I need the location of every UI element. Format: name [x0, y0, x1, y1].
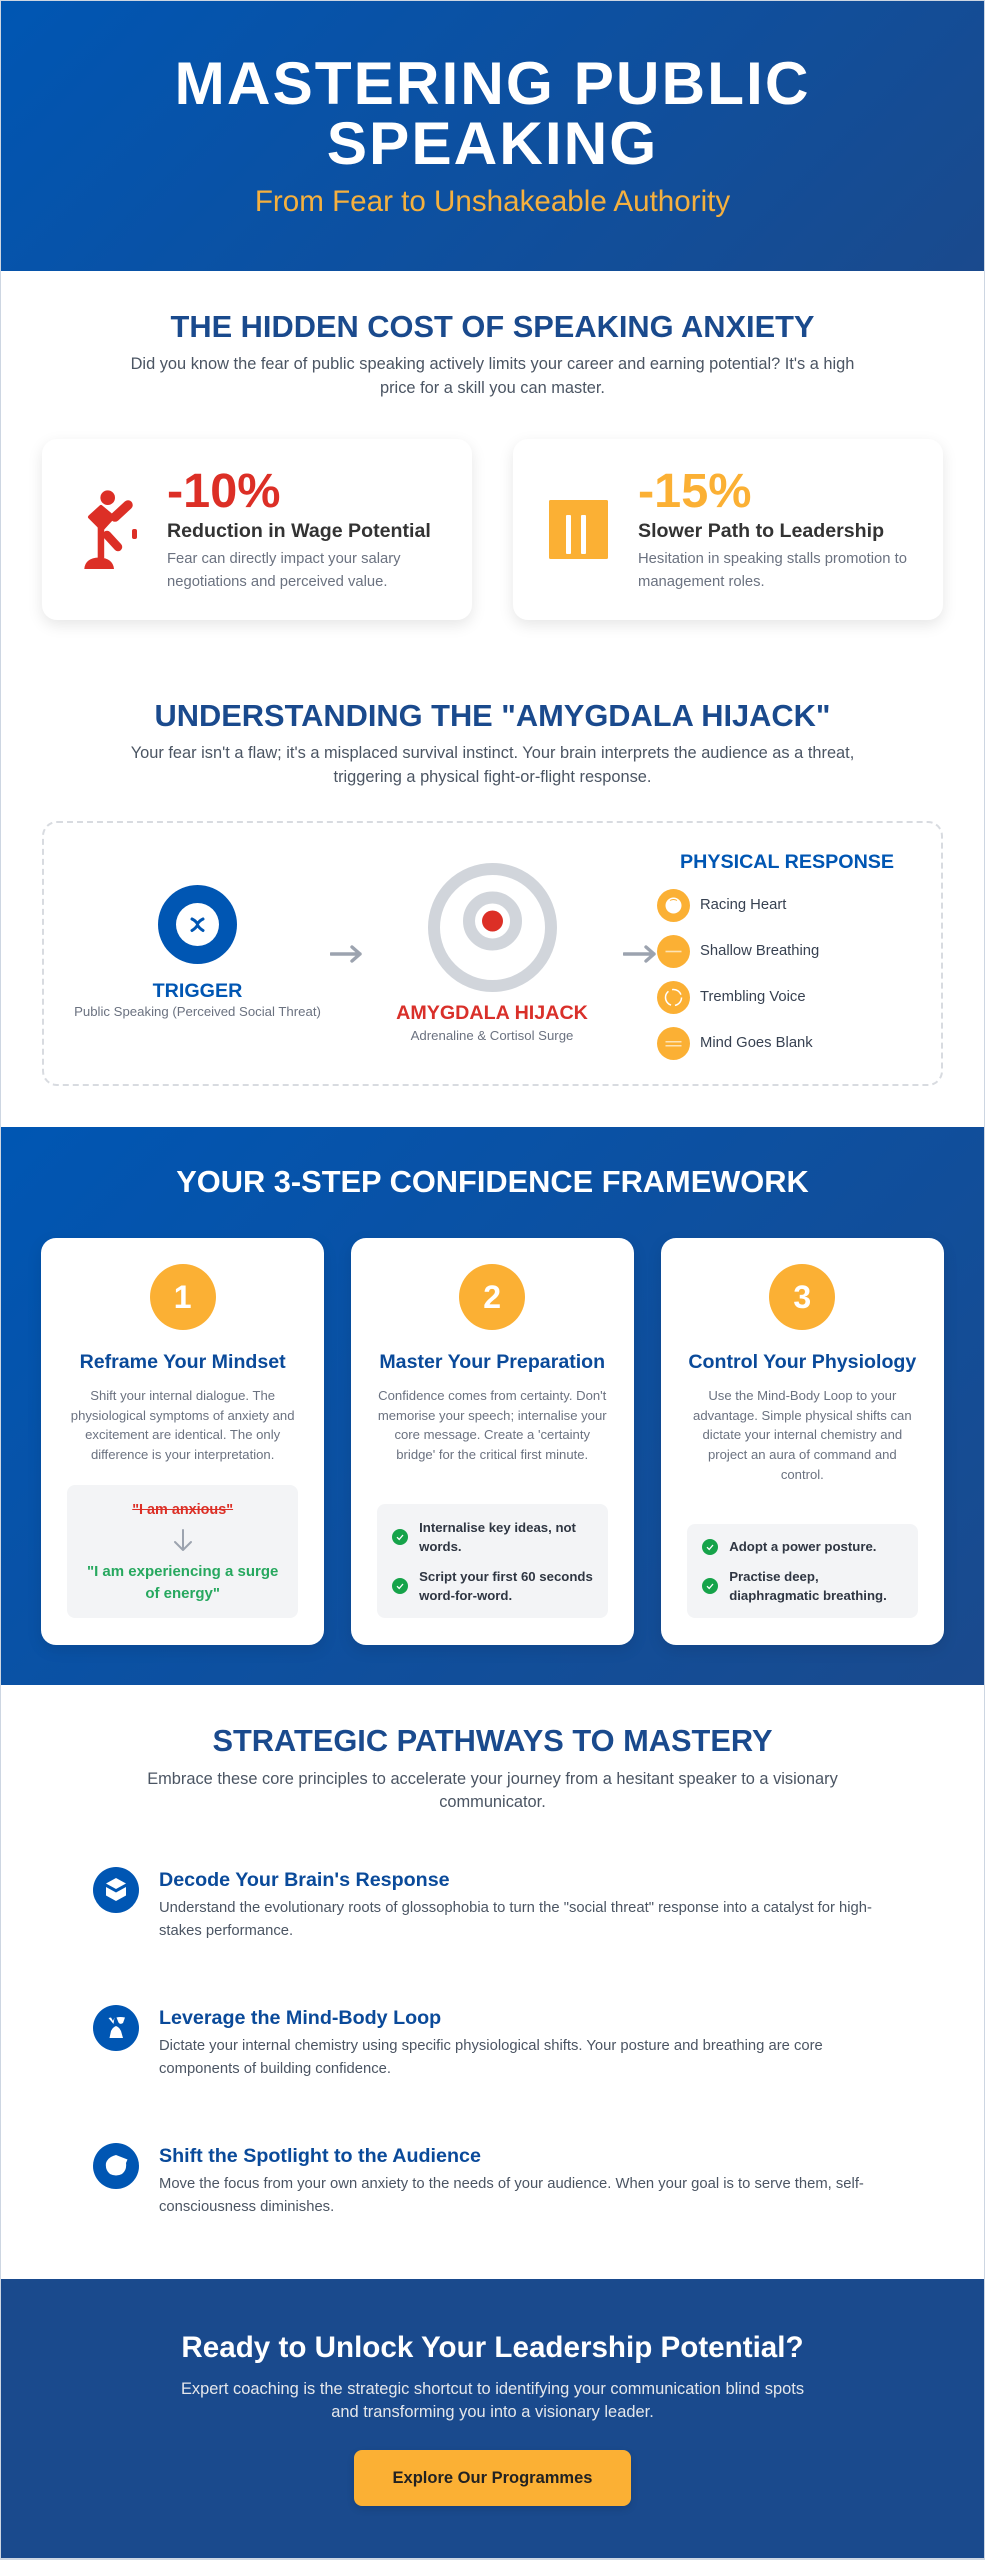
stat value: -10%: [167, 464, 280, 518]
step number: [150, 1264, 216, 1330]
flow diagram panel: [42, 821, 943, 1086]
arrow: down: [174, 1529, 192, 1551]
stat description: [167, 551, 401, 590]
step description: difference is your interpretation.: [91, 1447, 274, 1462]
step description: excitement are identical. The only: [85, 1427, 280, 1442]
pathway title: Shift the Spotlight to the Audience: [159, 2145, 481, 2167]
step card 3: [661, 1238, 944, 1645]
step description: project an aura of command and: [708, 1447, 897, 1462]
reframed phrase: "I am experiencing a surge: [87, 1563, 278, 1580]
reframed phrase: of energy": [145, 1585, 220, 1602]
step title: Reframe Your Mindset: [80, 1351, 286, 1373]
step description: dictate your internal chemistry and: [702, 1427, 902, 1442]
pathway description: components of building confidence.: [159, 2061, 391, 2077]
pathway description: consciousness diminishes.: [159, 2199, 334, 2215]
check item: Internalise key ideas, not: [419, 1520, 576, 1534]
check item: Script your first 60 seconds: [419, 1568, 593, 1584]
step description: [693, 1388, 912, 1482]
icon: anxious speaker figure: [84, 490, 137, 569]
pathway 2: [93, 2005, 823, 2077]
stat description: [638, 551, 907, 590]
step number: 1: [174, 1279, 191, 1315]
check item: words.: [419, 1539, 462, 1554]
intro text: triggering a physical fight-or-flight response.: [334, 768, 651, 786]
section: hidden cost of speaking anxiety: [0, 271, 985, 661]
stat value: -15%: [638, 464, 751, 518]
step description: bridge' for the critical first minute.: [396, 1447, 588, 1462]
response: trembling voice: Trembling Voice: [700, 988, 806, 1004]
step card 2: [351, 1238, 634, 1645]
step description: [378, 1388, 607, 1462]
icon: pause square: [549, 500, 608, 559]
response: trembling voice: [657, 981, 806, 1014]
arrow: trigger to hijack: [330, 945, 362, 963]
check item: [392, 1568, 593, 1603]
step number: [769, 1264, 835, 1330]
response: racing heart: [657, 889, 786, 922]
pathway description: Move the focus from your own anxiety to the needs of your audience. When your goal is to serve them, self-: [159, 2176, 864, 2192]
section: amygdala hijack: [0, 661, 985, 1127]
arrow: hijack to response: [623, 945, 656, 963]
intro text: [147, 1770, 838, 1811]
icon: spotlight: [93, 2143, 139, 2189]
response heading: PHYSICAL RESPONSE: [680, 851, 894, 873]
intro text: communicator.: [439, 1793, 546, 1811]
title: MASTERING PUBLIC: [175, 49, 810, 117]
check item: Adopt a power posture.: [729, 1538, 876, 1554]
pathway title: Leverage the Mind-Body Loop: [159, 2007, 441, 2029]
pathway description: [159, 2176, 864, 2215]
cta text: and transforming you into a visionary leader.: [331, 2403, 654, 2421]
node: trigger: [74, 885, 321, 1019]
call to action banner: [0, 2279, 985, 2558]
step description: Shift your internal dialogue. The: [90, 1388, 275, 1403]
stat card: slower leadership path: [513, 439, 943, 620]
title: [175, 49, 810, 176]
pathway title: Decode Your Brain's Response: [159, 1869, 450, 1891]
icon: box: [93, 1867, 139, 1913]
pathway 1: [93, 1867, 872, 1939]
step title: Master Your Preparation: [379, 1351, 605, 1373]
step description: core message. Create a 'certainty: [394, 1427, 590, 1442]
section: strategic pathways: [0, 1685, 985, 2279]
reframe example box: [67, 1485, 298, 1618]
trigger label: TRIGGER: [153, 980, 242, 1002]
heading: YOUR 3-STEP CONFIDENCE FRAMEWORK: [176, 1164, 809, 1199]
pathway description: Dictate your internal chemistry using specific physiological shifts. Your posture and breathing are core: [159, 2038, 823, 2054]
heading: THE HIDDEN COST OF SPEAKING ANXIETY: [171, 309, 814, 344]
cta text: [181, 2380, 804, 2421]
reframed phrase: [87, 1563, 278, 1602]
step description: memorise your speech; internalise your: [378, 1408, 607, 1422]
response: racing heart: Racing Heart: [700, 896, 786, 912]
intro text: Embrace these core principles to accelerate your journey from a hesitant speaker to a visionary: [147, 1770, 838, 1788]
check item: [702, 1568, 887, 1603]
pathway 3: [93, 2143, 864, 2215]
crossed out phrase: "I am anxious": [132, 1502, 233, 1518]
intro text: [131, 355, 854, 397]
icon: trigger target: [158, 885, 237, 964]
stat description: negotiations and perceived value.: [167, 574, 387, 590]
step description: Use the Mind-Body Loop to your: [708, 1388, 896, 1403]
heading: STRATEGIC PATHWAYS TO MASTERY: [212, 1723, 773, 1758]
pathway description: stakes performance.: [159, 1923, 293, 1939]
subtitle: From Fear to Unshakeable Authority: [255, 185, 730, 218]
hijack description: Adrenaline & Cortisol Surge: [411, 1028, 573, 1043]
heading: UNDERSTANDING THE "AMYGDALA HIJACK": [155, 698, 830, 733]
check item: [392, 1520, 576, 1554]
pathway description: Understand the evolutionary roots of glossophobia to turn the "social threat" response into a catalyst for high-: [159, 1900, 872, 1916]
cta button: Explore Our Programmes: [393, 2469, 592, 2487]
response: mind goes blank: [657, 1027, 813, 1060]
step number: 3: [793, 1279, 811, 1315]
stat description: Fear can directly impact your salary: [167, 551, 401, 567]
step description: [71, 1388, 294, 1462]
intro text: [131, 744, 854, 786]
section: 3-step confidence framework: [0, 1127, 985, 1685]
step description: control.: [781, 1467, 824, 1482]
step card 1: [41, 1238, 324, 1645]
step number: [459, 1264, 525, 1330]
cta heading: Ready to Unlock Your Leadership Potential?: [181, 2331, 804, 2364]
intro text: Did you know the fear of public speaking actively limits your career and earning potential? It's a high: [131, 355, 854, 373]
pathway description: [159, 1900, 872, 1939]
trigger description: Public Speaking (Perceived Social Threat): [74, 1004, 321, 1019]
step description: advantage. Simple physical shifts can: [693, 1408, 912, 1422]
check item: diaphragmatic breathing.: [729, 1588, 887, 1603]
response: mind goes blank: Mind Goes Blank: [700, 1034, 813, 1050]
step description: physiological symptoms of anxiety and: [71, 1408, 294, 1422]
node: amygdala hijack: [396, 863, 588, 1043]
checklist box: [687, 1524, 918, 1618]
icon: concentric target: [428, 863, 557, 992]
stat description: management roles.: [638, 574, 765, 590]
response: shallow breathing: [657, 935, 819, 968]
pathway description: [159, 2038, 823, 2077]
step number: 2: [483, 1279, 501, 1315]
header banner: [0, 0, 985, 271]
checklist box: [377, 1504, 608, 1618]
check item: Practise deep,: [729, 1568, 819, 1584]
title: SPEAKING: [327, 108, 658, 176]
step description: Confidence comes from certainty. Don't: [378, 1388, 606, 1403]
icon: mind and body: [93, 2005, 139, 2051]
step title: Control Your Physiology: [688, 1351, 916, 1373]
node: physical response: [657, 851, 894, 1060]
intro text: price for a skill you can master.: [380, 379, 605, 397]
response: shallow breathing: Shallow Breathing: [700, 942, 819, 958]
stat title: Reduction in Wage Potential: [167, 520, 431, 542]
cta button: [354, 2450, 631, 2506]
intro text: Your fear isn't a flaw; it's a misplaced survival instinct. Your brain interprets the audience as a threat,: [131, 744, 854, 762]
stat title: Slower Path to Leadership: [638, 520, 884, 542]
check item: word-for-word.: [419, 1588, 512, 1603]
hijack label: AMYGDALA HIJACK: [396, 1002, 588, 1024]
stat description: Hesitation in speaking stalls promotion to: [638, 551, 907, 567]
cta text: Expert coaching is the strategic shortcut to identifying your communication blind spots: [181, 2380, 804, 2398]
stat card: wage reduction: [42, 439, 472, 620]
